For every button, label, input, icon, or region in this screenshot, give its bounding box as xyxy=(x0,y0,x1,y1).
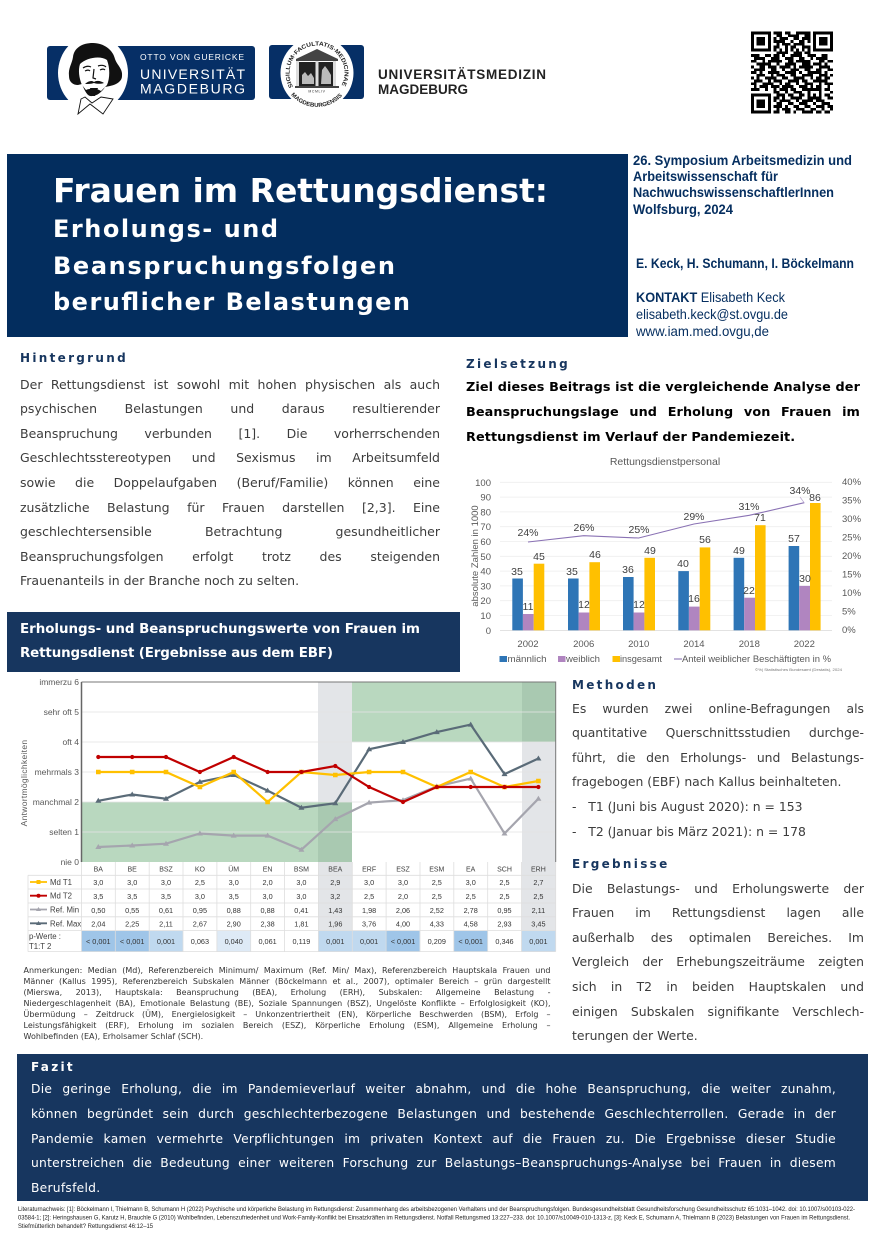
left axis labels: 50 xyxy=(480,552,491,563)
table values: < 0,001 xyxy=(86,937,111,946)
table values: 2,04 xyxy=(91,920,105,929)
logo: Universitätsmedizin Magdeburg seal: SIGILLUM·FACULTATIS·MEDICINAE xyxy=(286,42,349,88)
bar value labels: 16 xyxy=(688,593,700,605)
text: symposium xyxy=(633,153,852,217)
right axis labels: 40% xyxy=(842,477,862,488)
text: Anmerkungen: (Mierswa, 2013), Hauptskala: Beanspruchung (BEA), Erholung (ERH), Subskalen: Allgemeine Belastung - xyxy=(24,988,550,997)
text: symposium: NachwuchswissenschaftlerInnen xyxy=(633,185,834,200)
text: Ergebnisse: Die Belastungs- und Erholungswerte der xyxy=(572,881,864,896)
bar value labels xyxy=(511,492,821,613)
y axis labels: nie 0 xyxy=(61,857,79,867)
right axis labels: 20% xyxy=(842,551,862,562)
table values: 3,0 xyxy=(195,892,205,901)
table values: 0,61 xyxy=(159,906,173,915)
table column headers: EN xyxy=(263,866,272,874)
text: contact xyxy=(635,289,788,339)
text: Methoden: fragebogen (EBF) nach Kallus beinhalteten. xyxy=(572,774,841,789)
right axis labels: 30% xyxy=(842,514,862,525)
text: Fazit: Pandemie kamen vermehrte Verpflichtungen im privaten Kontext auf die Frauen zu. Die Ergebnisse dieser Studie xyxy=(31,1132,836,1146)
table values: 1,43 xyxy=(328,906,342,915)
optimal range bands xyxy=(82,682,556,862)
text: Hintergrund: Beanspruchung verbunden [1]. Die vorherrschenden xyxy=(20,426,440,441)
panel: title xyxy=(7,154,628,337)
text: Hintergrund: Geschlechtsstereotypen und Sexismus im Arbeitsumfeld xyxy=(20,450,440,465)
heading: Methoden: Methoden xyxy=(572,678,658,692)
table values: < 0,001 xyxy=(120,937,144,946)
text: Zielsetzung: Rettungsdienst im Verlauf der Pandemiezeit. xyxy=(466,430,795,444)
table values: 0,95 xyxy=(497,906,512,915)
table values: 2,9 xyxy=(330,878,340,887)
table column headers: BSM xyxy=(294,866,309,874)
left axis labels: 10 xyxy=(480,611,491,622)
right axis labels: 5% xyxy=(842,606,856,618)
table values: 4,00 xyxy=(396,920,410,929)
y axis labels: sehr oft 5 xyxy=(44,707,79,717)
table values: 0,001 xyxy=(529,937,548,946)
table values: 3,45 xyxy=(531,920,546,929)
text: Ergebnisse: sich in T2 in beiden Hauptskalen und xyxy=(572,979,864,994)
table values: 2,11 xyxy=(159,920,173,929)
table values: 3,0 xyxy=(466,878,476,887)
text: Zielsetzung: Ziel dieses Beitrags ist die vergleichende Analyse der xyxy=(466,380,860,394)
table values: 0,001 xyxy=(360,937,378,946)
text: symposium: Wolfsburg, 2024 xyxy=(633,202,733,217)
table values: 2,5 xyxy=(466,892,476,901)
table legend labels: T1:T 2 xyxy=(29,942,51,951)
right axis labels: 35% xyxy=(842,496,862,506)
line: Ref. Max xyxy=(95,722,541,810)
line chart with data table xyxy=(19,677,556,952)
heading: main title: Frauen im Rettungsdienst: xyxy=(53,171,548,210)
table values: 2,5 xyxy=(432,878,442,887)
category labels: 2006 xyxy=(573,639,594,650)
logo: Universitätsmedizin Magdeburg seal: UNIVERSITÄTSMEDIZIN xyxy=(378,67,546,82)
text: Hintergrund: sowie die Doppelaufgaben (Beruf/Familie) können eine xyxy=(20,475,440,490)
logo: Otto von Guericke Universität Magdeburg: UNIVERSITÄT xyxy=(140,66,245,82)
heading: subtitle: Beanspruchungsfolgen xyxy=(53,252,395,280)
table values: 3,76 xyxy=(362,920,376,929)
category labels: 2010 xyxy=(628,639,649,650)
logo: Universitätsmedizin Magdeburg seal: MAGDEBURG xyxy=(378,82,468,97)
table values: 3,0 xyxy=(93,878,103,887)
left axis labels: 80 xyxy=(480,508,491,518)
y axis labels: immerzu 6 xyxy=(39,677,79,687)
table values: 0,55 xyxy=(125,906,139,915)
text: Ergebnisse: einigen Subskalen signifikante Verschlech- xyxy=(572,1004,864,1019)
heading: subtitle: Erholungs- und xyxy=(53,215,278,243)
table values: 4,58 xyxy=(464,920,478,929)
table column headers: EA xyxy=(466,866,476,874)
heading: Hintergrund: Hintergrund xyxy=(20,351,128,365)
text: Zielsetzung: Beanspruchungslage und Erholung von Frauen im xyxy=(466,404,860,420)
bar value labels: 56 xyxy=(699,534,711,546)
text: Anmerkungen: Übermüdung – Zeitdruck (ÜM), Energielosigkeit – Unkonzentriertheit (EN), Körperliche Beschwerden (BSM), Erfolg – xyxy=(24,1010,550,1019)
text: Methoden: führt, die den Erholungs- und Belastungs- xyxy=(572,750,864,765)
bar value labels: 45 xyxy=(533,551,545,563)
table values: 2,78 xyxy=(464,906,478,915)
icon: QR code xyxy=(751,32,833,114)
table column headers: KO xyxy=(195,866,206,874)
table values: 3,0 xyxy=(296,878,306,887)
table values: 2,5 xyxy=(432,892,442,901)
table values: 2,06 xyxy=(396,906,410,915)
text: Ergebnisse: terungen der Werte. xyxy=(572,1028,698,1043)
bar value labels: 35 xyxy=(566,566,578,578)
right axis labels: 0% xyxy=(842,625,856,636)
table values: 4,33 xyxy=(430,920,444,929)
table legend labels: Md T1 xyxy=(50,878,72,887)
table values xyxy=(86,878,548,946)
table values: < 0,001 xyxy=(391,937,415,946)
text: Literaturnachweis xyxy=(18,1206,855,1230)
text: Fazit: Berufsfeld. xyxy=(31,1181,100,1195)
logo: Universitätsmedizin Magdeburg seal xyxy=(269,42,546,107)
text: Fazit: Die geringe Erholung, die im Pandemieverlauf weiter abnahm, und die hohe Beanspruchung, die weiter zunahm, xyxy=(31,1082,836,1096)
panel: section band: Rettungsdienst (Ergebnisse aus dem EBF) xyxy=(20,646,333,661)
line: Md T1 xyxy=(96,770,541,804)
text: Fazit: unterstreichen die Bedeutung einer weiteren Forschung zur Belastungs–Beanspruchungs-Analyse bei Frauen in diesem xyxy=(31,1156,836,1170)
heading: subtitle: beruflicher Belastungen xyxy=(53,288,410,316)
table values: 1,96 xyxy=(328,920,342,929)
text: Ergebnisse: Vergleich der Erhebungszeiträume zeigten xyxy=(572,954,864,969)
table values: 3,0 xyxy=(229,878,239,887)
bar value labels: 30 xyxy=(799,573,811,585)
source note: ©%| Statistisches Bundesamt (Destatis), 2024 xyxy=(755,668,842,672)
y axis title: Antwortmöglichkeiten xyxy=(19,740,29,826)
table column headers: ESZ xyxy=(396,866,411,874)
text: Anmerkungen: Männer (Kallus 1995), Referenzbereich Subskalen Männer (Böckelmann et al., 2007), optimaler Bereich – grün dargestellt xyxy=(24,977,550,986)
table values: 0,346 xyxy=(495,937,514,946)
text: Hintergrund: psychischen Belastungen und daraus resultierender xyxy=(20,401,440,416)
table values: 3,0 xyxy=(296,892,306,901)
table legend labels: Ref. Min xyxy=(50,906,79,914)
text: Methoden: Es wurden zwei online-Befragungen als xyxy=(572,701,864,716)
legend: männlich xyxy=(508,654,546,665)
legend: insgesamt xyxy=(620,654,662,665)
text: symposium: 26. Symposium Arbeitsmedizin und xyxy=(633,153,852,168)
bars: weiblich xyxy=(523,586,810,630)
text: Anmerkungen: Niedergeschlagenheit (BA), Emotionale Belastung (BE), Soziale Spannungen (BSZ), Ungelöste Konflikte – Erfolglosigkeit (KO), xyxy=(24,999,550,1008)
left axis labels: 70 xyxy=(480,522,491,533)
table values: 2,5 xyxy=(533,892,543,901)
table values: 3,0 xyxy=(161,878,171,887)
text: Anmerkungen: Anmerkungen: Median (Md), Referenzbereich Minimum/ Maximum (Ref. Min/ Max), Referenzbereich Hauptskala Frauen und xyxy=(24,966,550,974)
right axis labels: 10% xyxy=(842,588,862,599)
table values: 2,25 xyxy=(125,920,139,929)
text: contact: KONTAKT Elisabeth Keck xyxy=(636,289,786,305)
table values: 0,50 xyxy=(91,906,105,915)
right axis labels: 25% xyxy=(842,532,862,544)
table values: 0,41 xyxy=(294,906,309,915)
text: Ergebnisse: außerhalb des optimalen Bereiches. Im xyxy=(572,930,864,945)
text: Hintergrund: Frauenanteils in der Branche noch zu selten. xyxy=(20,573,299,588)
table column headers xyxy=(94,866,546,874)
table values: 0,95 xyxy=(193,906,207,915)
heading: Ergebnisse: Ergebnisse xyxy=(572,857,670,871)
table values: 3,5 xyxy=(127,892,137,901)
line value labels: 34% xyxy=(789,485,811,497)
table values: 3,5 xyxy=(161,892,171,901)
line: Md T2 xyxy=(96,755,541,804)
bar value labels: 36 xyxy=(622,564,634,576)
text: Anmerkungen xyxy=(24,966,550,1041)
table column headers: BSZ xyxy=(159,866,174,874)
left axis labels: 20 xyxy=(480,596,491,607)
bar value labels: 40 xyxy=(677,558,689,570)
line value labels xyxy=(517,485,811,539)
text: Anmerkungen: Wohlbefinden (EA), Erholsamer Schlaf (SCH). xyxy=(24,1032,203,1041)
y axis labels xyxy=(33,677,79,867)
text: Methoden: quantitative Querschnittsstudien durchge- xyxy=(572,725,864,740)
table values: 2,5 xyxy=(499,892,510,901)
text: Anmerkungen: Leistungsfähigkeit (ERF), Erholung im sozialen Bereich (ESZ), Körperliche Erholung (ESM), Allgemeine Erholung – xyxy=(24,1021,550,1030)
table values: 2,52 xyxy=(430,906,444,915)
table values: 2,11 xyxy=(532,906,545,915)
table column headers: SCH xyxy=(497,866,512,874)
line value labels: 24% xyxy=(517,527,539,539)
legend: weiblich xyxy=(565,654,600,665)
table column headers: ERF xyxy=(362,866,376,874)
heading: subtitle xyxy=(53,215,410,316)
logo: Otto von Guericke Universität Magdeburg xyxy=(47,43,255,115)
text: Ergebnisse: Frauen im Rettungsdienst lagen alle xyxy=(572,905,864,920)
y axis labels: selten 1 xyxy=(49,827,79,837)
panel: section band xyxy=(7,612,460,672)
bar value labels: 57 xyxy=(788,533,800,545)
table values: 2,0 xyxy=(263,878,273,887)
line value labels: 26% xyxy=(573,522,595,534)
heading: Fazit: Fazit xyxy=(31,1060,75,1074)
table values: 2,7 xyxy=(533,878,543,887)
bar chart: Rettungsdienstpersonal xyxy=(470,456,862,672)
table values: 0,88 xyxy=(227,906,241,915)
text: Ergebnisse xyxy=(572,881,864,1043)
text: authors: E. Keck, H. Schumann, I. Böckelmann xyxy=(636,256,854,271)
text: Fazit: können begründet sein durch geschlechterbezogene Belastungen und bestehende Geschlechterrollen. Gerade in der xyxy=(31,1107,836,1121)
bar value labels: 12 xyxy=(633,599,645,611)
left axis labels: 30 xyxy=(480,582,491,592)
line value labels: 29% xyxy=(683,511,705,523)
table values: 2,5 xyxy=(499,878,510,887)
category labels: 2022 xyxy=(794,639,815,650)
table column headers: ÜM xyxy=(228,866,239,874)
line: Anteil weiblicher Beschäftigten xyxy=(528,503,804,542)
table values: 1,98 xyxy=(362,906,376,915)
category labels: 2014 xyxy=(683,639,705,650)
left axis labels: 60 xyxy=(480,537,491,548)
bar value labels: 49 xyxy=(644,545,656,557)
text: Hintergrund: geschlechtersensible Betrachtung gesundheitlicher xyxy=(20,524,440,539)
table values: 3,5 xyxy=(93,892,103,901)
table legend labels: Ref. Max xyxy=(50,919,81,928)
table values: 3,0 xyxy=(263,892,273,901)
left axis title: absolute Zahlen in 1000 xyxy=(470,505,481,607)
text: contact: elisabeth.keck@st.ovgu.de xyxy=(636,306,788,322)
table values: 0,061 xyxy=(258,937,277,946)
y axis labels: manchmal 2 xyxy=(33,797,79,807)
table legend labels: p-Werte : xyxy=(29,932,61,941)
table values: 2,90 xyxy=(227,920,241,929)
table values: 0,001 xyxy=(326,937,344,946)
table column headers: BE xyxy=(128,866,137,874)
bars: männlich xyxy=(512,546,799,630)
table values: 1,81 xyxy=(294,920,309,929)
table values: 2,67 xyxy=(193,920,207,929)
bar value labels: 22 xyxy=(743,585,755,597)
text: Literaturnachweis: Stiefmütterlich behandelt? Rettungsdienst 46:12–15 xyxy=(18,1223,153,1230)
text: Zielsetzung xyxy=(466,380,860,444)
left axis labels: 100 xyxy=(475,478,491,489)
left axis labels: 40 xyxy=(480,566,491,578)
table values: 3,0 xyxy=(127,878,137,887)
y axis labels: oft 4 xyxy=(62,737,79,747)
data table xyxy=(28,862,556,952)
panel: section band: Erholungs- und Beanspruchungswerte von Frauen im xyxy=(20,622,420,637)
table values: 0,001 xyxy=(157,937,175,946)
logo: Universitätsmedizin Magdeburg seal: MAGDEBURGENSIS xyxy=(291,92,342,107)
table values: 2,93 xyxy=(497,920,512,929)
table legend labels xyxy=(29,878,81,951)
legend: Anteil weiblicher Beschäftigten in % xyxy=(682,654,832,665)
text: Hintergrund: Beanspruchungsfolgen erfolgt trotz des steigenden xyxy=(20,549,440,564)
line: Ref. Min xyxy=(95,776,541,852)
table values: 3,0 xyxy=(398,878,408,887)
table column headers: ERH xyxy=(531,866,546,874)
text: contact: www.iam.med.ovgu,de xyxy=(635,323,769,339)
table values: 0,209 xyxy=(428,937,446,946)
text: Methoden: - T2 (Januar bis März 2021): n = 178 xyxy=(572,824,806,839)
legend xyxy=(500,654,832,665)
bar value labels: 71 xyxy=(754,512,766,524)
text: symposium: Arbeitswissenschaft für xyxy=(633,169,779,184)
table values: 0,88 xyxy=(260,906,275,915)
table values: 3,0 xyxy=(364,878,374,887)
table values: 2,0 xyxy=(398,892,408,901)
text: Hintergrund: Der Rettungsdienst ist sowohl mit hohen physischen als auch xyxy=(20,377,440,392)
table column headers: BEA xyxy=(328,866,343,874)
bar value labels: 49 xyxy=(733,545,745,557)
left axis labels xyxy=(475,478,491,637)
table values: 2,38 xyxy=(260,920,275,929)
right axis labels xyxy=(842,477,862,636)
text: Hintergrund: zusätzliche Belastung für Frauen darstellen [2,3]. Eine xyxy=(20,500,440,515)
bar value labels: 46 xyxy=(589,549,601,561)
table values: 3,2 xyxy=(330,892,340,901)
line value labels: 25% xyxy=(628,524,650,536)
table values: 0,040 xyxy=(225,937,243,946)
category labels: 2018 xyxy=(739,639,760,650)
text: Fazit xyxy=(31,1082,836,1195)
chart title: Rettungsdienstpersonal xyxy=(610,456,720,468)
text: Methoden: - T1 (Juni bis August 2020): n = 153 xyxy=(572,799,802,814)
table column headers: ESM xyxy=(429,866,445,874)
text: Methoden xyxy=(572,701,864,839)
logo: Universitätsmedizin Magdeburg seal: MCMLIV xyxy=(308,90,326,94)
panel: Fazit xyxy=(17,1054,868,1201)
table values: 2,5 xyxy=(364,892,374,901)
line value labels: 31% xyxy=(738,501,760,513)
table values: 0,119 xyxy=(293,937,310,946)
y axis labels: mehrmals 3 xyxy=(35,767,79,777)
category labels: 2002 xyxy=(517,639,539,650)
table values: 2,5 xyxy=(195,878,205,887)
heading: Zielsetzung: Zielsetzung xyxy=(466,357,570,371)
bar value labels: 86 xyxy=(809,492,821,504)
category labels xyxy=(517,639,815,650)
logo: Otto von Guericke Universität Magdeburg: OTTO VON GUERICKE xyxy=(140,52,244,62)
text: symposium, authors and contact xyxy=(633,153,854,339)
table legend labels: Md T2 xyxy=(50,892,72,901)
table values: 0,063 xyxy=(191,937,209,946)
bar value labels: 12 xyxy=(578,599,590,611)
left axis labels: 0 xyxy=(486,626,491,637)
bar value labels: 11 xyxy=(523,601,534,613)
table values: < 0,001 xyxy=(458,937,483,946)
table values: 3,5 xyxy=(229,892,239,901)
left axis labels: 90 xyxy=(480,492,491,504)
bars: insgesamt xyxy=(534,503,821,630)
logo: Otto von Guericke Universität Magdeburg: MAGDEBURG xyxy=(140,80,245,96)
right axis labels: 15% xyxy=(842,570,862,580)
bar value labels: 35 xyxy=(511,566,523,578)
table column headers: BA xyxy=(94,866,103,874)
text: Hintergrund xyxy=(20,377,440,588)
